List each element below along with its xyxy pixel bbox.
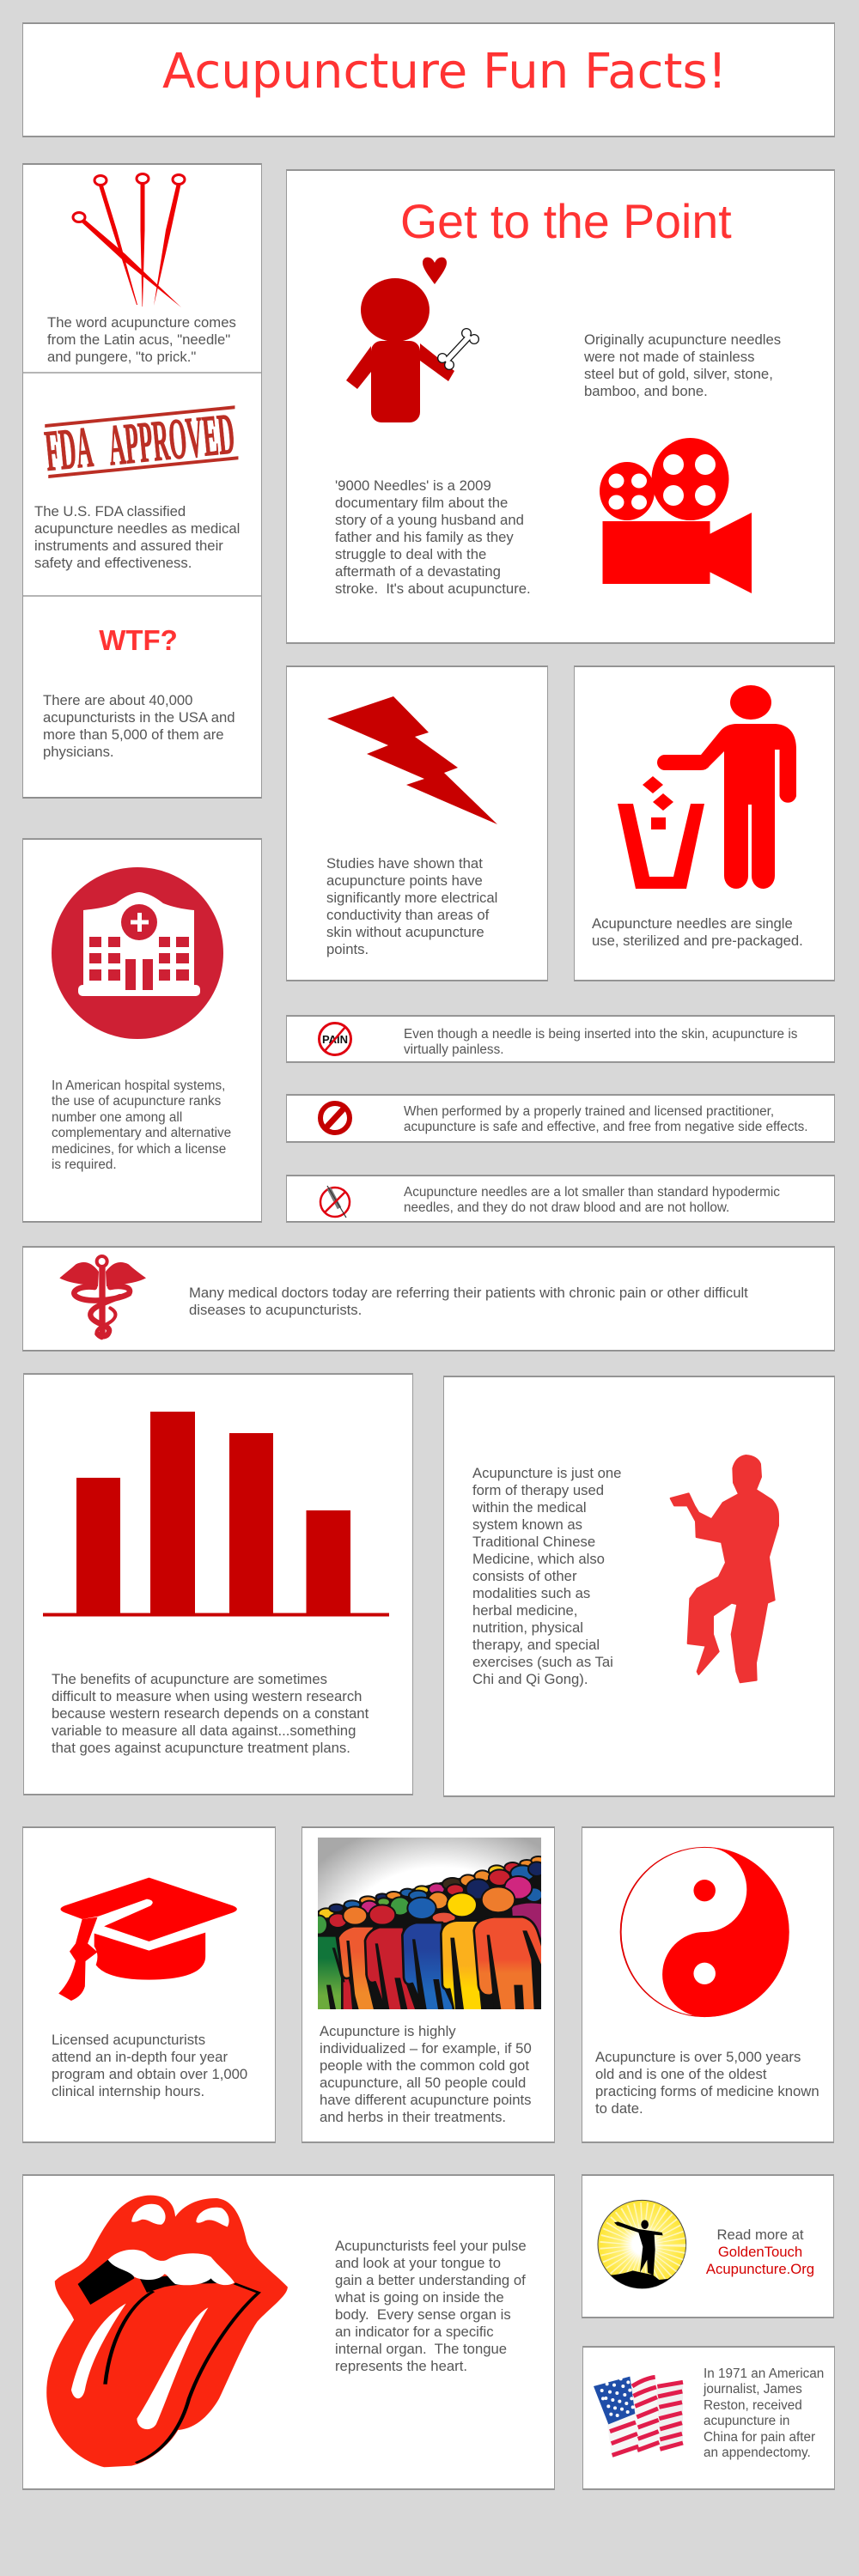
- text: TCM: modalities such as: [472, 1585, 590, 1601]
- text: 5000 years: Acupuncture is over 5,000 years: [595, 2049, 801, 2065]
- text: TCM: nutrition, physical: [472, 1619, 583, 1636]
- text: read more link: [706, 2227, 814, 2277]
- icon: tai chi silhouette: [671, 1455, 778, 1682]
- text: individualized: people with the common cold got: [320, 2057, 529, 2074]
- text: 5000 years: [595, 2049, 819, 2117]
- text: acupuncturist count: There are about 40,000: [43, 692, 192, 708]
- icon: no pain: PAIN: [322, 1033, 348, 1046]
- text: hospital systems: number one among all: [52, 1110, 182, 1125]
- panel: medical doctors: [22, 1246, 835, 1352]
- icon: graduation cap: [58, 1878, 237, 2001]
- text: electrical conductivity: points.: [326, 941, 369, 957]
- panel: 5000 years: [582, 1826, 834, 2143]
- panel: benefits bar chart: [23, 1373, 413, 1795]
- text: 1971 journalist: Reston, received: [704, 2398, 802, 2413]
- text: 1971 journalist: an appendectomy.: [704, 2445, 811, 2460]
- icon: lightning bolt: [327, 696, 497, 824]
- text: licensed: [52, 2032, 247, 2099]
- text: safe and effective: [404, 1104, 808, 1134]
- icon: no pain: [320, 1024, 350, 1054]
- text: painless: virtually painless.: [404, 1042, 503, 1057]
- text: read more link: Read more at: [716, 2227, 804, 2243]
- icon: FDA approved stamp: FDA: [42, 414, 95, 483]
- icon: yin yang: [621, 1847, 789, 2017]
- text: acupuncturist count: more than 5,000 of them are: [43, 726, 224, 743]
- panel: electrical conductivity: [286, 665, 548, 981]
- panel: smaller needles: [286, 1175, 835, 1223]
- text: TCM: herbal medicine,: [472, 1602, 577, 1619]
- panel: title: [22, 22, 835, 137]
- text: TCM: exercises (such as Tai: [472, 1654, 613, 1670]
- panel: FDA approved: [22, 373, 262, 596]
- text: safe and effective: When performed by a properly trained and licensed practitioner,: [404, 1104, 774, 1119]
- text: electrical conductivity: significantly more electrical: [326, 890, 497, 906]
- icon: hospital: [52, 867, 223, 1039]
- icon: person with heart and bone: [346, 258, 479, 422]
- text: smaller needles: Acupuncture needles are a lot smaller than standard hypodermic: [404, 1185, 780, 1200]
- text: acupuncturist count: [43, 692, 235, 760]
- text: word origin: The word acupuncture comes: [47, 314, 236, 331]
- text: FDA classification: [34, 503, 240, 571]
- text: individualized: [320, 2023, 532, 2125]
- icon: movie camera: [600, 438, 752, 593]
- panel: tongue: [22, 2174, 555, 2490]
- panel: get to the point: [286, 169, 835, 644]
- bar chart: [43, 1412, 389, 1616]
- text: electrical conductivity: [326, 855, 497, 957]
- text: needle materials: were not made of stainless: [584, 349, 754, 365]
- text: TCM: within the medical: [472, 1499, 587, 1516]
- text: needle materials: Originally acupuncture needles: [584, 331, 781, 348]
- text: FDA classification: The U.S. FDA classified: [34, 503, 186, 519]
- text: individualized: have different acupuncture points: [320, 2092, 531, 2108]
- text: APPROVED: [106, 400, 237, 477]
- panel: needles: [22, 163, 262, 373]
- text: painless: [404, 1027, 797, 1057]
- text: smaller needles: [404, 1185, 780, 1215]
- panel: WTF: [22, 596, 262, 799]
- text: benefits: that goes against acupuncture treatment plans.: [52, 1740, 350, 1756]
- icon: prohibition sign: [320, 1103, 350, 1133]
- text: benefits: The benefits of acupuncture are sometimes: [52, 1671, 327, 1687]
- text: licensed: Licensed acupuncturists: [52, 2032, 205, 2048]
- panel: single use needles: [574, 665, 835, 981]
- text: TCM: therapy, and special: [472, 1637, 600, 1653]
- text: TCM: system known as: [472, 1516, 582, 1533]
- heading: get to the point: Get to the Point: [400, 195, 732, 248]
- heading: WTF?: WTF?: [99, 624, 178, 656]
- text: needle materials: [584, 331, 781, 399]
- text: 1971 journalist: acupuncture in: [704, 2414, 789, 2428]
- panel: licensed acupuncturists: [22, 1826, 276, 2143]
- text: licensed: attend an in-depth four year: [52, 2049, 228, 2065]
- text: 1971 journalist: journalist, James: [704, 2382, 802, 2397]
- panel: safe and effective: [286, 1094, 835, 1143]
- text: electrical conductivity: Studies have shown that: [326, 855, 483, 872]
- text: acupuncturist count: acupuncturists in the USA and: [43, 709, 235, 726]
- text: TCM: form of therapy used: [472, 1482, 604, 1498]
- text: read more link: GoldenTouch: [718, 2244, 802, 2260]
- text: electrical conductivity: conductivity than areas of: [326, 907, 489, 923]
- icon: acupuncture needles: [73, 173, 185, 307]
- panel: read more: [582, 2174, 834, 2318]
- text: hospital systems: In American hospital systems,: [52, 1078, 225, 1093]
- image: colourful crowd: [311, 1838, 545, 2011]
- icon: FDA approved stamp: [42, 400, 238, 483]
- text: hospital systems: the use of acupuncture ranks: [52, 1094, 221, 1109]
- text: 1971 journalist: China for pain after: [704, 2430, 815, 2445]
- text: benefits: variable to measure all data against...something: [52, 1722, 356, 1739]
- text: 9000 needles: '9000 Needles' is a 2009 documentary film about the story of a young husband and father and his family as they struggle to deal with the aftermath of a devastating stroke. It's about acupuncture.: [335, 477, 531, 597]
- text: TCM: Traditional Chinese: [472, 1534, 595, 1550]
- text: safe and effective: acupuncture is safe and effective, and free from negative side effects.: [404, 1120, 808, 1134]
- text: single use: Acupuncture needles are single: [592, 915, 793, 932]
- text: individualized: acupuncture, all 50 people could: [320, 2075, 526, 2091]
- text: licensed: clinical internship hours.: [52, 2083, 204, 2099]
- text: FDA classification: safety and effectiveness.: [34, 555, 192, 571]
- text: TCM: Acupuncture is just one: [472, 1465, 621, 1481]
- text: single use: use, sterilized and pre-packaged.: [592, 933, 803, 949]
- text: single use: [592, 915, 803, 949]
- text: benefits: because western research depends on a constant: [52, 1705, 369, 1722]
- text: hospital systems: complementary and alternative: [52, 1126, 231, 1140]
- text: TCM: consists of other: [472, 1568, 577, 1584]
- text: electrical conductivity: acupuncture points have: [326, 872, 483, 889]
- text: 5000 years: old and is one of the oldest: [595, 2066, 766, 2082]
- text: FDA classification: acupuncture needles as medical: [34, 520, 240, 537]
- text: TCM: [472, 1465, 621, 1687]
- text: acupuncturist count: physicians.: [43, 744, 114, 760]
- panel: hospital: [22, 838, 262, 1223]
- text: medical doctors: [189, 1285, 748, 1318]
- text: hospital systems: [52, 1078, 231, 1172]
- text: word origin: and pungere, "to prick.": [47, 349, 196, 365]
- text: medical doctors: diseases to acupuncturists.: [189, 1302, 362, 1318]
- text: 5000 years: to date.: [595, 2100, 643, 2117]
- text: individualized: and herbs in their treatments.: [320, 2109, 506, 2125]
- text: 5000 years: practicing forms of medicine known: [595, 2083, 819, 2099]
- icon: caduceus: [59, 1256, 146, 1338]
- panel: 1971 journalist: [582, 2346, 835, 2490]
- text: individualized: individualized – for example, if 50: [320, 2040, 532, 2057]
- text: needle materials: bamboo, and bone.: [584, 383, 708, 399]
- text: medical doctors: Many medical doctors today are referring their patients with chronic pain or other difficult: [189, 1285, 748, 1301]
- text: word origin: from the Latin acus, "needle": [47, 331, 230, 348]
- panel: painless: [286, 1015, 835, 1063]
- text: hospital systems: medicines, for which a license: [52, 1142, 226, 1157]
- text: smaller needles: needles, and they do not draw blood and are not hollow.: [404, 1200, 729, 1215]
- text: word origin: [47, 314, 236, 365]
- text: licensed: program and obtain over 1,000: [52, 2066, 247, 2082]
- text: 1971 journalist: In 1971 an American: [704, 2366, 824, 2381]
- text: read more link: Acupuncture.Org: [706, 2261, 814, 2277]
- text: pulse and tongue: Acupuncturists feel your pulse and look at your tongue to gain a better understanding of what is going on inside the body. Every sense organ is an indicator for a specific internal organ. The tongue represents the heart.: [335, 2238, 527, 2374]
- text: painless: Even though a needle is being inserted into the skin, acupuncture is: [404, 1027, 797, 1042]
- icon: person discarding trash: [618, 685, 796, 889]
- panel: traditional chinese medicine: [443, 1376, 835, 1797]
- icon: no hypodermic needle: [320, 1186, 350, 1218]
- text: hospital systems: is required.: [52, 1157, 117, 1172]
- text: individualized: Acupuncture is highly: [320, 2023, 456, 2039]
- text: FDA classification: instruments and assured their: [34, 538, 223, 554]
- text: needle materials: steel but of gold, silver, stone,: [584, 366, 773, 382]
- title: Acupuncture Fun Facts!: [162, 44, 727, 100]
- panel: individualized: [302, 1826, 555, 2143]
- text: 1971 journalist: [703, 2366, 824, 2460]
- text: electrical conductivity: skin without acupuncture: [326, 924, 484, 940]
- icon: american flag: [594, 2375, 683, 2458]
- text: TCM: Chi and Qi Gong).: [472, 1671, 588, 1687]
- text: TCM: Medicine, which also: [472, 1551, 605, 1567]
- text: benefits: [52, 1671, 369, 1756]
- text: benefits: difficult to measure when using western research: [52, 1688, 362, 1704]
- icon: tongue and lips: [46, 2196, 288, 2467]
- icon: figure in sun: [595, 2200, 690, 2293]
